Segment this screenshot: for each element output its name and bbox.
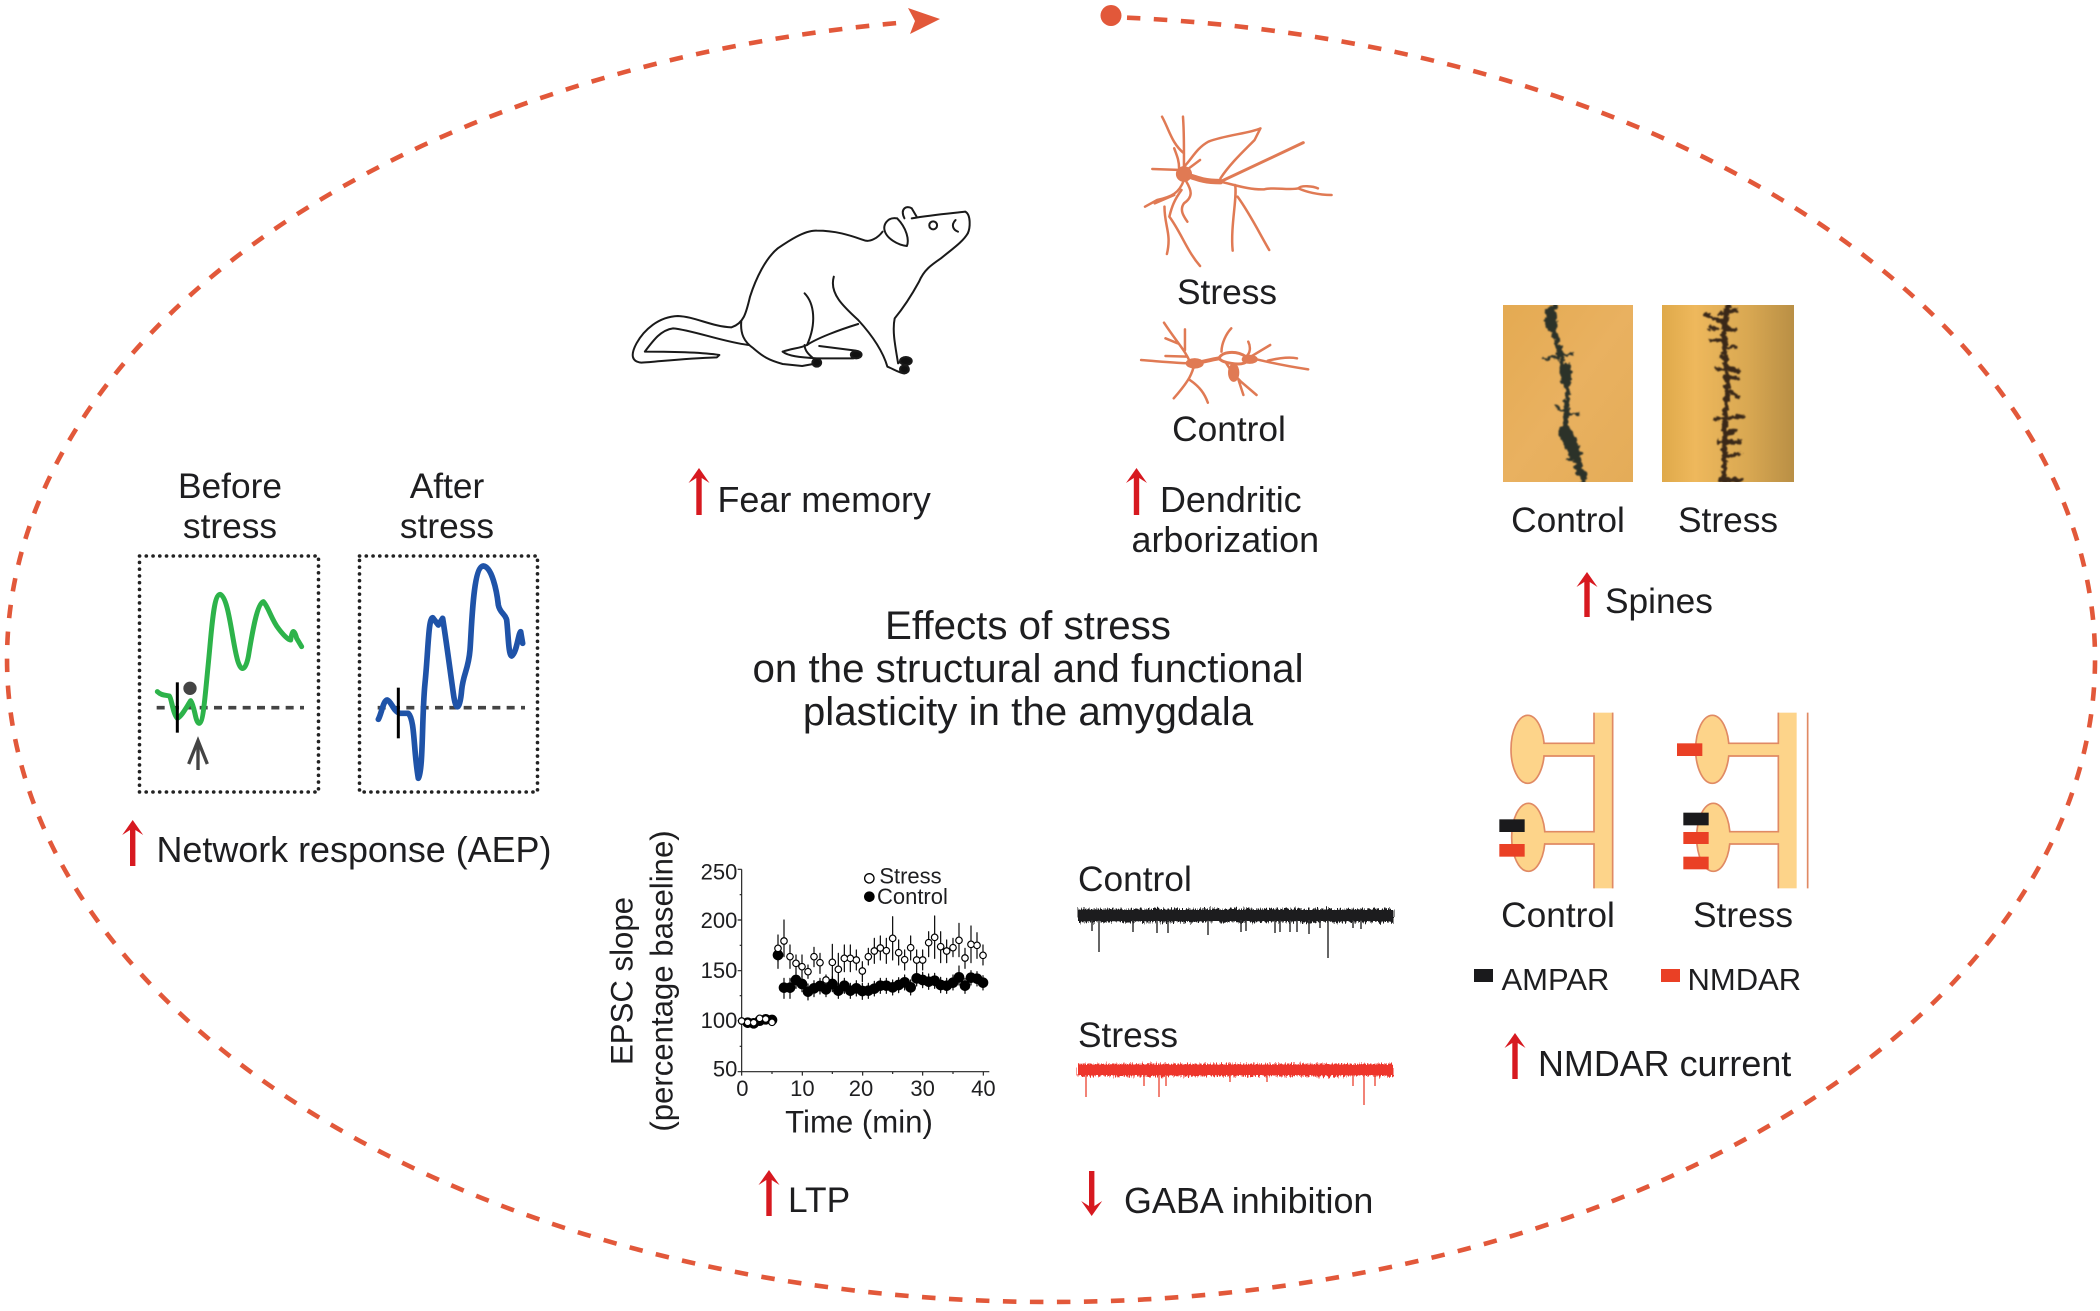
label: stress: Stress [1177, 273, 1277, 312]
x tick labels: 0 [736, 1076, 748, 1101]
arrow up: NMDAR current [1504, 1033, 1526, 1079]
x axis title: Time (min) [785, 1105, 933, 1140]
y tick labels: 150 [701, 958, 737, 983]
label: network response: Network response (AEP) [156, 830, 551, 870]
label: control trace: Control [1078, 860, 1192, 899]
panel: LTP [605, 830, 996, 1220]
photo: stress dendrite [1662, 300, 1794, 487]
label: NMDAR current: NMDAR current [1538, 1044, 1791, 1084]
panel: NMDAR current [1474, 713, 1808, 1084]
x tick labels: 20 [849, 1076, 873, 1101]
y axis subtitle: (percentage baseline) [645, 830, 680, 1132]
chart legend [864, 863, 948, 909]
diagram: control spines [1499, 713, 1613, 888]
labels: control and stress: Control [1501, 896, 1615, 935]
labels: control and stress [1501, 896, 1793, 935]
x tick labels: 40 [971, 1076, 996, 1101]
legend: NMDAR: NMDAR [1688, 962, 1801, 997]
arrow up: LTP [758, 1170, 780, 1216]
label: dendritic arborization: Dendritic [1160, 480, 1302, 520]
series: control [748, 947, 983, 1023]
arrow up: network response [122, 820, 143, 866]
label: stress trace: Stress [1078, 1016, 1178, 1055]
series: stress [742, 916, 983, 1023]
chart legend: Stress [879, 863, 942, 888]
chart: before stress trace [140, 556, 318, 792]
icon: rat [633, 207, 970, 373]
panel: fear memory [633, 207, 970, 520]
panel: dendritic arborization [1126, 117, 1332, 560]
axes [738, 869, 989, 1076]
title: on the structural and functional [752, 646, 1304, 691]
y tick labels: 100 [701, 1008, 737, 1033]
heading: before stress: Before [178, 467, 282, 506]
photo: control dendrite [1503, 300, 1633, 487]
y tick labels: 200 [701, 908, 737, 933]
legend: AMPAR: AMPAR [1502, 962, 1609, 997]
heading: after stress: stress [400, 507, 494, 546]
diagram: stress spines [1677, 713, 1808, 888]
y tick labels [701, 859, 737, 1081]
x tick labels: 30 [910, 1076, 935, 1101]
chart: after stress trace [360, 556, 538, 792]
chart: control trace [1078, 909, 1393, 958]
label: LTP: LTP [788, 1181, 850, 1220]
title [752, 603, 1304, 734]
panel: network response AEP [122, 467, 551, 870]
chart legend: Control [877, 884, 948, 909]
chart: stress trace [1078, 1064, 1393, 1105]
x tick labels [736, 1076, 996, 1101]
arrow up: fear memory [688, 468, 710, 515]
y tick labels: 50 [713, 1056, 737, 1081]
labels: control and stress [1511, 501, 1778, 540]
panel: GABA inhibition [1078, 860, 1393, 1221]
labels: control and stress: Stress [1678, 501, 1778, 540]
y tick labels: 250 [701, 859, 737, 884]
title: Effects of stress [885, 603, 1171, 648]
chart: EPSC slope over time [605, 830, 996, 1140]
arrow down: GABA inhibition [1081, 1171, 1102, 1216]
label: control: Control [1172, 410, 1286, 449]
heading: before stress: stress [183, 507, 277, 546]
icon: control neuron [1141, 323, 1308, 403]
labels: control and stress: Control [1511, 501, 1625, 540]
arrow up: spines [1576, 572, 1598, 617]
arrow up: dendritic arborization [1126, 468, 1147, 515]
x tick labels: 10 [790, 1076, 815, 1101]
icon: stress neuron [1145, 117, 1332, 266]
label: fear memory: Fear memory [718, 480, 931, 520]
panel: spines [1503, 300, 1794, 621]
heading: after stress: After [410, 467, 484, 506]
labels: control and stress: Stress [1693, 896, 1793, 935]
label: dendritic arborization: arborization [1132, 520, 1319, 560]
label: GABA inhibition: GABA inhibition [1124, 1181, 1373, 1221]
label: spines: Spines [1605, 582, 1713, 621]
title: plasticity in the amygdala [803, 689, 1254, 734]
y axis title: EPSC slope [605, 897, 640, 1065]
